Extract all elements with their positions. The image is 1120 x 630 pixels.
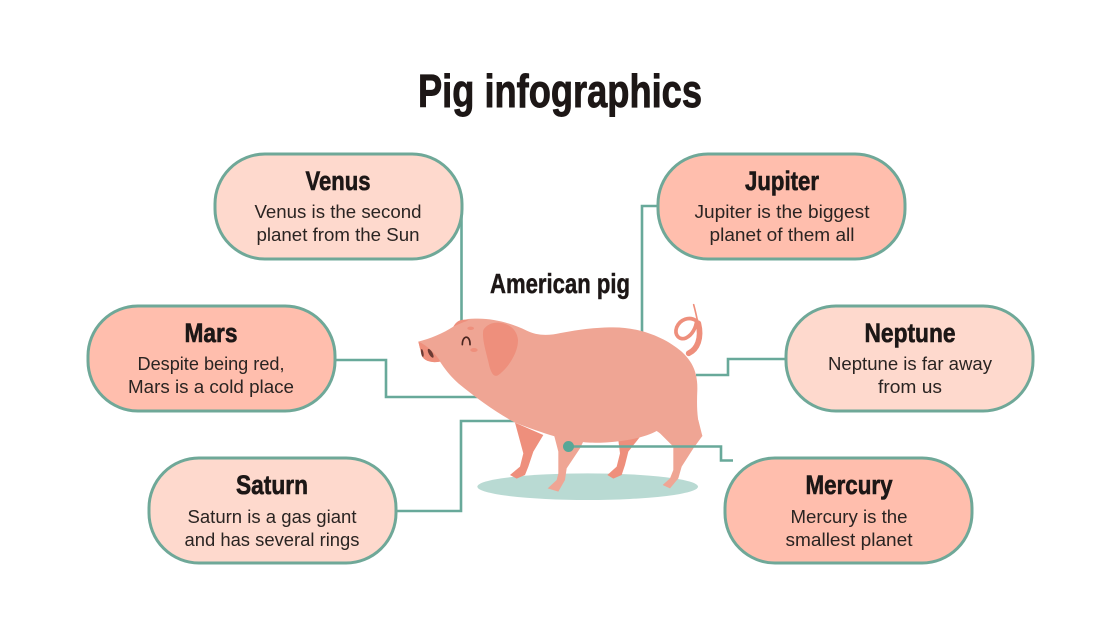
nostrils: [420, 349, 424, 357]
panel: Venus: Venus: [306, 166, 370, 196]
panel: Saturn: [149, 458, 396, 563]
eye: [462, 337, 470, 345]
panel: Venus: Venus is the second: [254, 202, 422, 222]
label: American pig: American pig: [490, 268, 630, 299]
body: [418, 319, 702, 443]
panel: Mars: Despite being red,: [138, 354, 284, 374]
ground shadow: [477, 473, 698, 500]
tail: [676, 305, 700, 353]
snout: [418, 342, 440, 362]
panel: Mars: Mars is a cold place: [128, 377, 294, 397]
hind leg: [657, 420, 702, 488]
illustration: American pig: [418, 305, 702, 500]
panel: Saturn: Saturn is a gas giant: [188, 507, 356, 527]
panel: Mars: [88, 306, 335, 411]
panel: Neptune: Neptune is far away: [828, 354, 992, 374]
panel: Venus: planet from the Sun: [256, 225, 420, 245]
title: Pig infographics: [418, 65, 702, 117]
far front leg: [510, 423, 543, 479]
panel: Jupiter: Jupiter is the biggest: [694, 202, 870, 222]
panel: Mercury: Mercury: [806, 470, 892, 500]
panel: Saturn: and has several rings: [184, 530, 360, 550]
cheek marks: [470, 348, 478, 352]
panel: Mars: Mars: [184, 318, 238, 348]
far back leg: [607, 436, 641, 479]
connector lines: [335, 200, 786, 511]
panel: Venus: [215, 154, 462, 259]
panel: Mercury: smallest planet: [786, 530, 912, 550]
ear: [483, 323, 518, 376]
small ear: [453, 320, 468, 327]
panel: Jupiter: Jupiter: [745, 166, 819, 196]
panel: Mercury: [725, 458, 972, 563]
panel: Mercury: Mercury is the: [790, 507, 908, 527]
panel: Neptune: from us: [878, 377, 942, 397]
panel: Neptune: [786, 306, 1033, 411]
panel: Neptune: Neptune: [864, 318, 956, 348]
near front leg: [548, 435, 584, 492]
panel: Jupiter: planet of them all: [710, 225, 854, 245]
panel: Saturn: Saturn: [236, 470, 308, 500]
panel: Jupiter: [658, 154, 905, 259]
mercury connector with dot: [563, 441, 733, 460]
